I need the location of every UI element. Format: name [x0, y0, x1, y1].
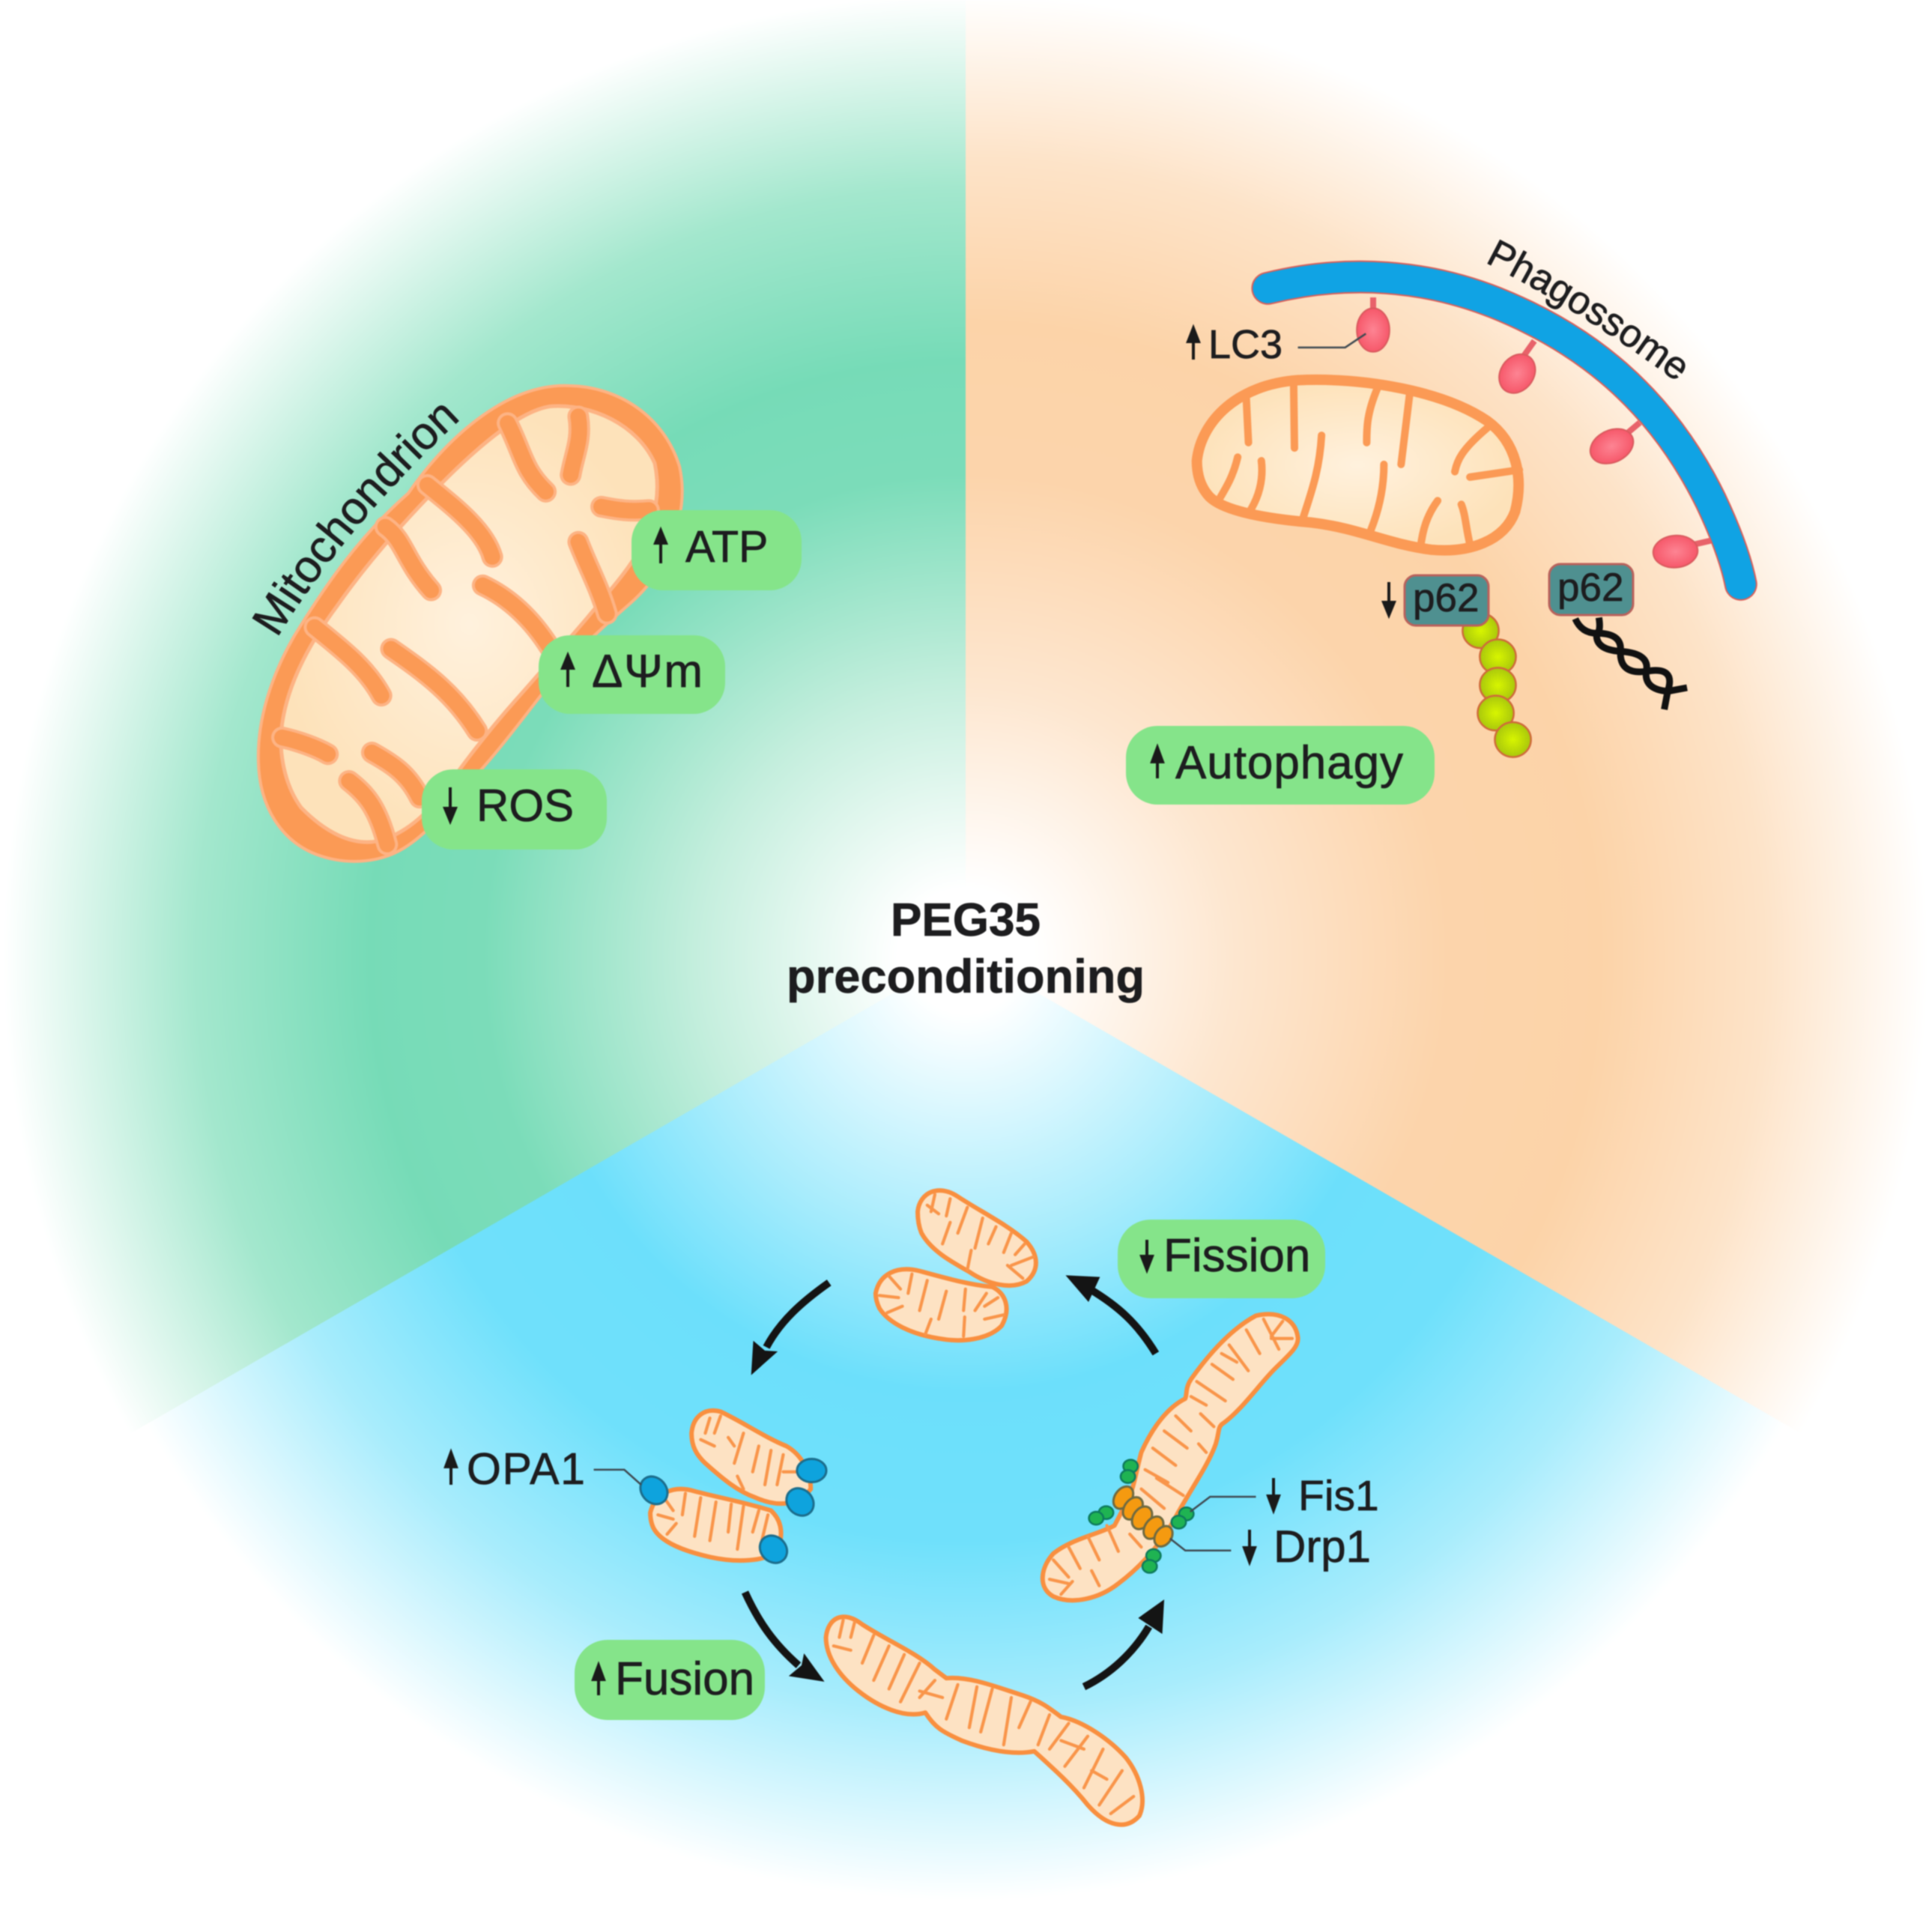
- arrow: fission to fusion: [751, 1283, 829, 1375]
- icon: ubiquitin chain: [1462, 614, 1531, 757]
- label: LC3 up: LC3: [1208, 322, 1283, 367]
- panel: mitochondrial dynamics (blue sector): [0, 951, 1929, 1932]
- callout: Fission down: Fission: [1163, 1230, 1310, 1282]
- label: Phagossome: Phagossome: [1486, 238, 1686, 379]
- icon: p62 bound to DNA: p62: [1557, 566, 1623, 610]
- icon: separated mitochondria: [876, 1190, 1036, 1340]
- icon: DNA helix: [1575, 617, 1687, 709]
- callout: Autophagy up: [1126, 726, 1435, 805]
- icon: p62 bound to ubiquitin chain: [1384, 575, 1489, 626]
- callout: Fission down: [1118, 1220, 1325, 1298]
- icon: engulfed mitochondrion: [1197, 380, 1519, 551]
- panel: autophagy (orange sector): [966, 0, 1929, 1512]
- callout: Fusion up: Fusion: [615, 1653, 754, 1705]
- arrow: fusion to elongated: [745, 1592, 825, 1682]
- arrow: elongated to fission: [1084, 1599, 1164, 1687]
- label: Mitochondrion: Mitochondrion: [252, 405, 460, 636]
- callout: Fusion up: [575, 1640, 765, 1720]
- callout: ATP up: ATP: [685, 522, 768, 572]
- icon: p62 bound to ubiquitin chain: p62: [1413, 576, 1479, 620]
- icon: elongated fused mitochondrion: [826, 1617, 1142, 1825]
- label: OPA1 up: OPA1: [467, 1444, 585, 1494]
- icon: fusing mitochondria with OPA1: [594, 1411, 826, 1566]
- callout: ROS down: [422, 769, 607, 850]
- label: Drp1 down: Drp1: [1274, 1521, 1371, 1572]
- icon: mitochondrion undergoing fission: [1043, 1314, 1298, 1600]
- title: PEG35 preconditioning: preconditioning: [787, 951, 1145, 1003]
- callout: Autophagy up: Autophagy: [1175, 737, 1403, 789]
- icon: large mitochondrion: [258, 386, 682, 861]
- title: PEG35 preconditioning: PEG35: [891, 894, 1041, 946]
- icon: p62 bound to DNA: [1549, 564, 1633, 615]
- label: Fis1 down: Fis1: [1298, 1472, 1379, 1520]
- callout: ROS down: ROS: [476, 781, 574, 831]
- callout: membrane potential up: [539, 635, 725, 714]
- callout: membrane potential up: ΔΨm: [592, 646, 703, 697]
- callout: ATP up: [632, 510, 802, 590]
- icon: phagosome membrane: [1268, 277, 1741, 584]
- title: PEG35 preconditioning: [787, 894, 1145, 1003]
- panel: mitochondrial function (green sector): [0, 0, 966, 1514]
- icon: LC3 proteins: [1298, 297, 1711, 571]
- arrow: elongated to separated: [1065, 1275, 1156, 1354]
